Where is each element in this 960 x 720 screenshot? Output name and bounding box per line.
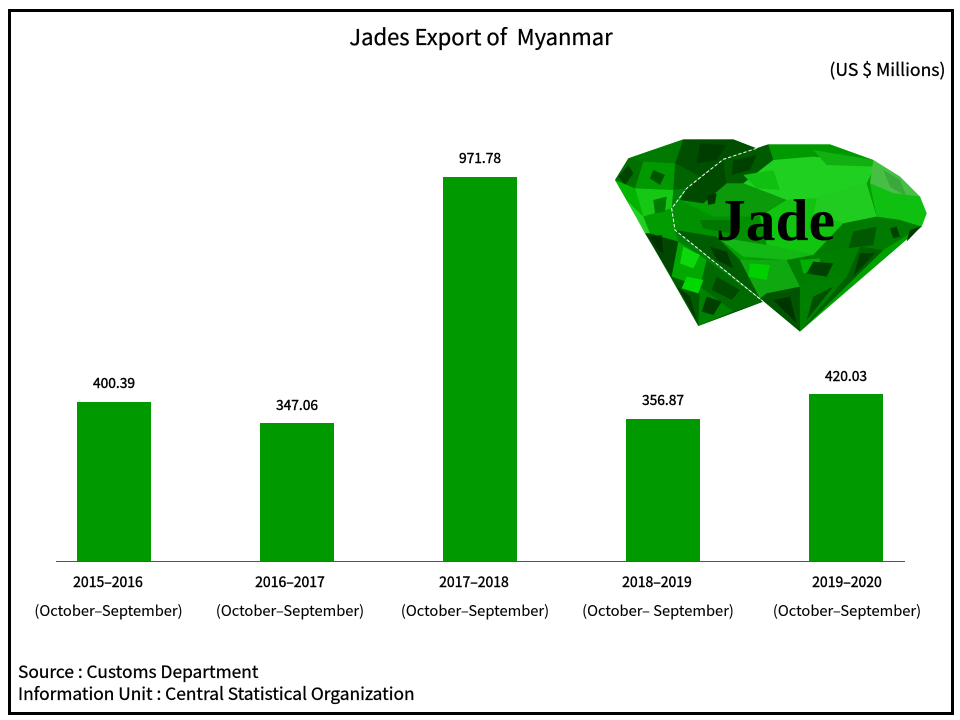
bar 2015-2016 — [77, 372, 151, 561]
category labels: 2015–2016 — [73, 572, 143, 592]
bar 2016-2017 — [260, 394, 334, 561]
bar 2016-2017: 347.06 — [276, 394, 318, 414]
category sublabels: (October–September) — [773, 600, 921, 621]
source note — [18, 658, 415, 705]
bar 2019-2020 — [809, 365, 883, 561]
bar 2018-2019: 356.87 — [642, 389, 684, 409]
category sublabels — [34, 600, 921, 621]
category sublabels: (October–September) — [34, 600, 183, 621]
axis line — [56, 560, 905, 562]
bar 2015-2016: 400.39 — [93, 372, 135, 392]
unit label: (US $ Millions) — [829, 57, 946, 82]
front gem — [672, 144, 927, 332]
category sublabels: (October–September) — [216, 600, 364, 621]
gem seam highlight — [672, 148, 763, 302]
source note: Information Unit : Central Statistical Organization — [18, 680, 415, 705]
back gem — [615, 139, 763, 326]
source note: Source : Customs Department — [18, 658, 259, 683]
bar 2019-2020: 420.03 — [825, 365, 867, 385]
category sublabels: (October–September) — [401, 600, 549, 621]
category labels: 2019–2020 — [812, 572, 882, 592]
category labels: 2017–2018 — [439, 572, 509, 592]
category labels: 2016–2017 — [255, 572, 325, 592]
category labels: 2018–2019 — [622, 572, 692, 592]
bar 2017-2018 — [443, 147, 517, 561]
title: Jades Export of Myanmar — [349, 20, 613, 52]
icon: jade gemstones — [615, 139, 927, 332]
gem label: Jade — [716, 187, 835, 253]
category sublabels: (October– September) — [582, 600, 734, 621]
bar 2017-2018: 971.78 — [459, 147, 501, 167]
category labels — [73, 572, 882, 592]
bar chart — [56, 147, 905, 562]
bar 2018-2019 — [626, 389, 700, 561]
